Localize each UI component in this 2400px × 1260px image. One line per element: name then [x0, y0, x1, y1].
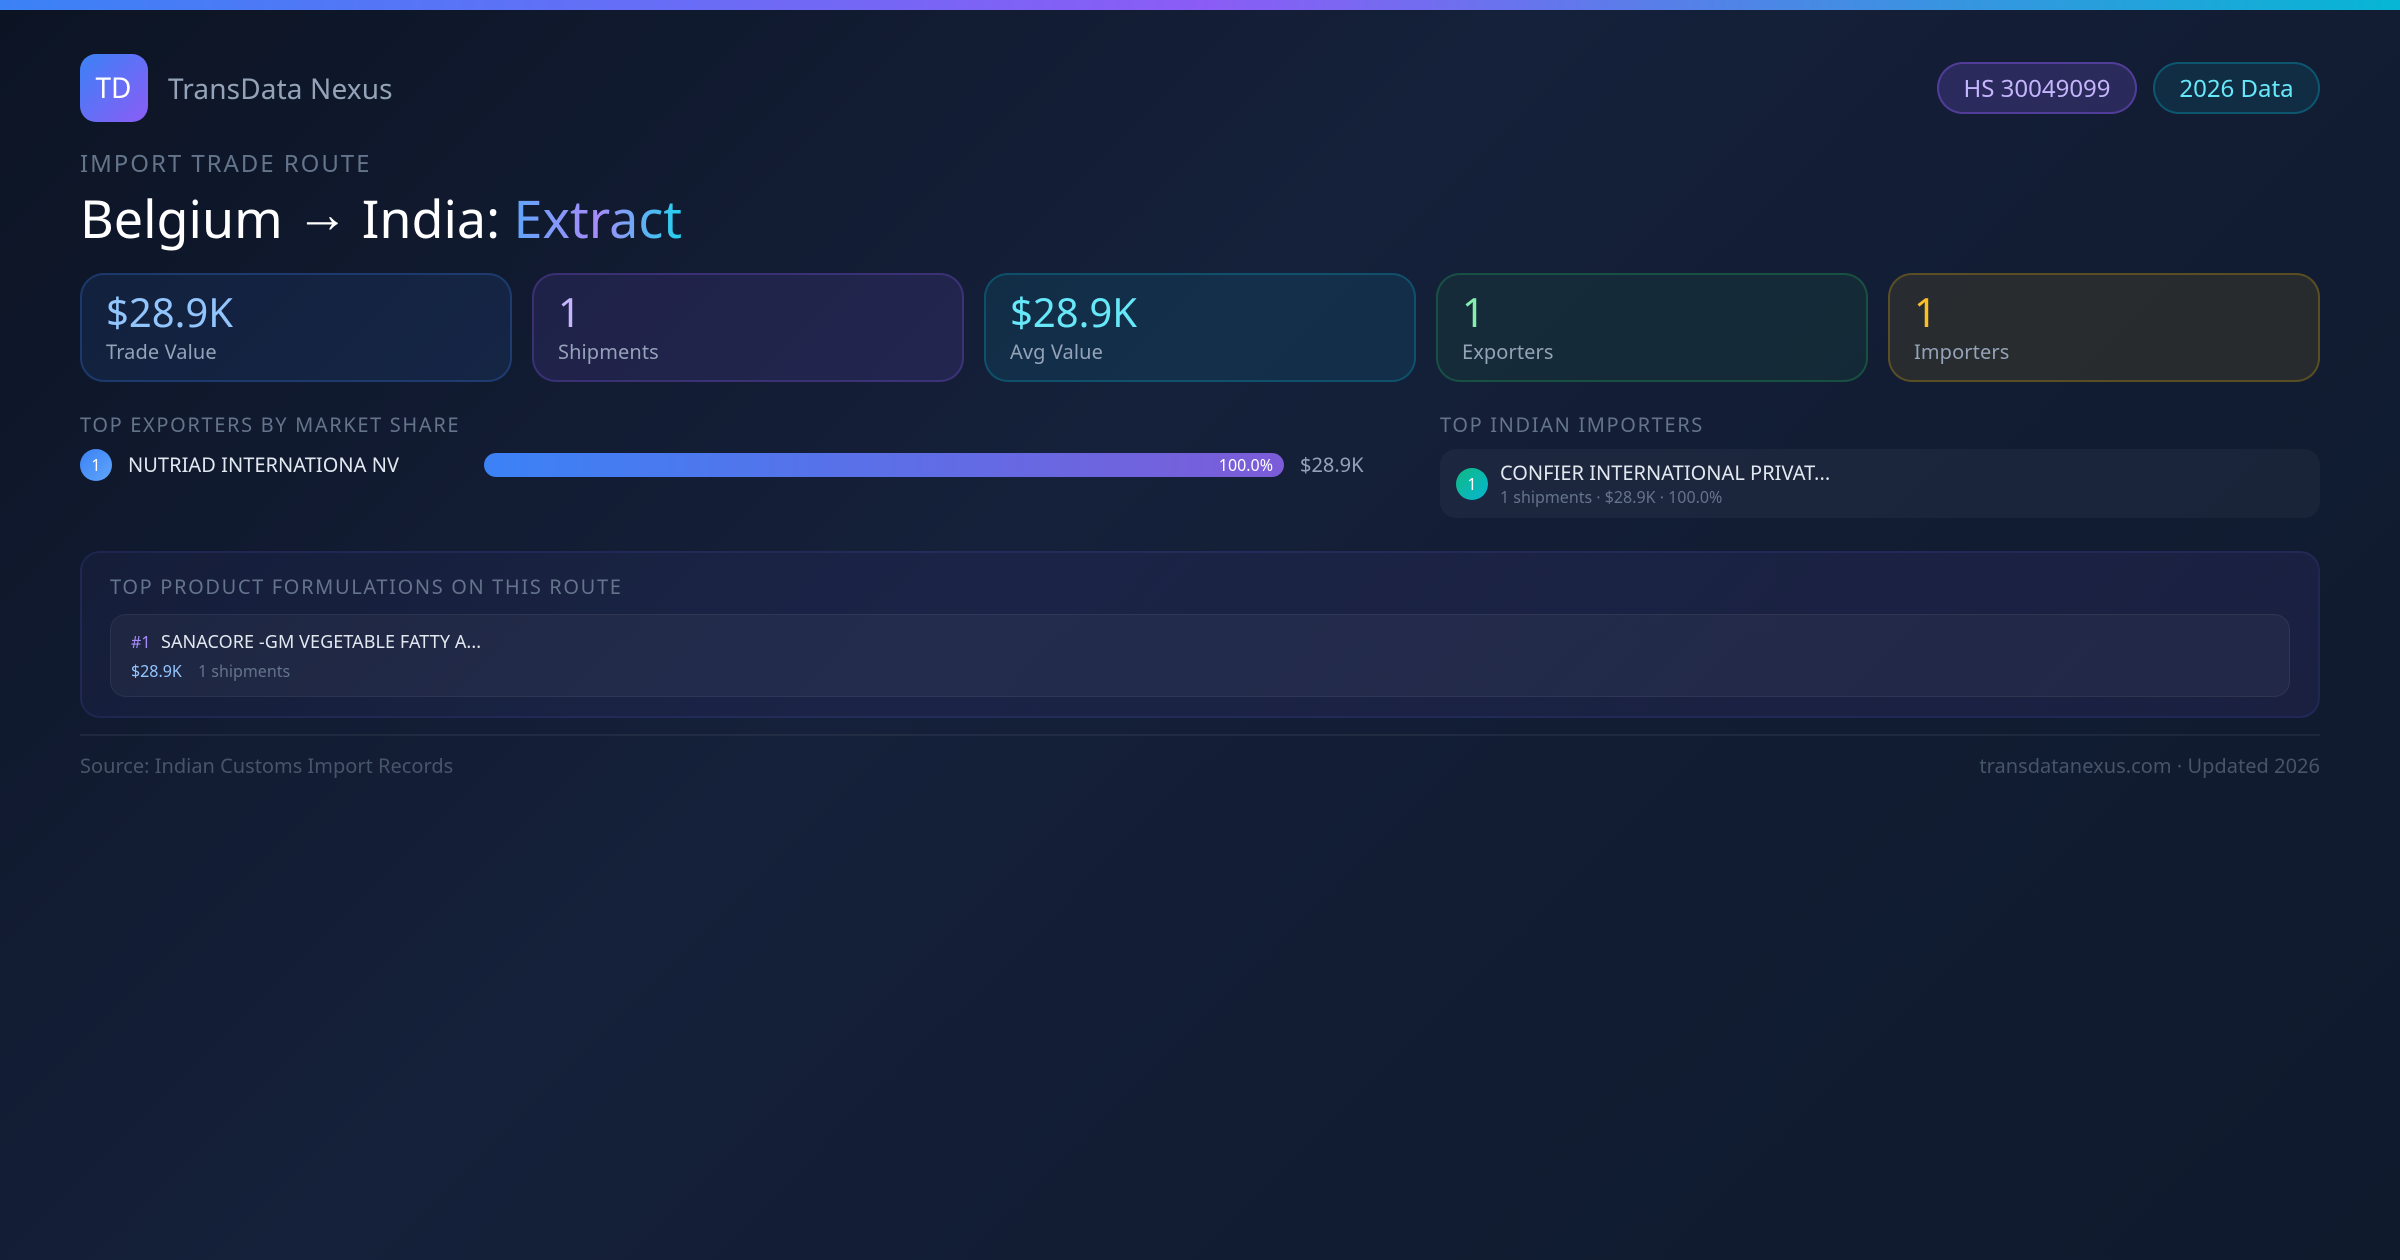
product name: SANACORE -GM VEGETABLE FATTY A...	[161, 630, 481, 654]
importer rank badge: 1	[1467, 473, 1477, 495]
product item 1	[110, 614, 2290, 697]
exporter share bar: 100.0%	[1219, 454, 1273, 476]
footer divider	[80, 734, 2320, 736]
stat card: trade value: $28.9K	[106, 284, 233, 339]
panel: top product formulations	[80, 551, 2320, 718]
stat card: shipments	[532, 273, 964, 382]
stat card: exporters	[1436, 273, 1868, 382]
exporter share bar	[484, 453, 1284, 477]
stat card: importers: 1	[1914, 284, 1937, 339]
stat card: avg value: Avg Value	[1010, 338, 1103, 365]
stat card: exporters: Exporters	[1462, 338, 1554, 365]
stat card: avg value	[984, 273, 1416, 382]
top gradient bar	[0, 0, 2400, 10]
footer: source: Source: Indian Customs Import Records	[80, 752, 453, 779]
pill: HS code	[1937, 62, 2137, 114]
panel heading: TOP PRODUCT FORMULATIONS ON THIS ROUTE	[110, 573, 622, 600]
stat card: exporters: 1	[1462, 284, 1485, 339]
stat card: importers	[1888, 273, 2320, 382]
brand name: TransData Nexus	[168, 70, 393, 108]
heading: top importers: TOP INDIAN IMPORTERS	[1440, 411, 1704, 438]
pill: data year	[2153, 62, 2320, 114]
stat card: shipments: 1	[558, 284, 581, 339]
pill: data year: 2026 Data	[2179, 72, 2294, 105]
importer details: 1 shipments · $28.9K · 100.0%	[1500, 486, 1722, 508]
stat card: importers: Importers	[1914, 338, 2009, 365]
product rank: #1	[131, 631, 150, 653]
exporter row 1	[80, 449, 1364, 481]
exporter rank badge: 1	[91, 454, 101, 476]
logo: TD	[80, 54, 148, 122]
title: Belgium → India: Extract	[80, 183, 682, 254]
importer name: CONFIER INTERNATIONAL PRIVAT...	[1500, 459, 1830, 486]
importer row 1	[1440, 449, 2320, 518]
product shipments: 1 shipments	[198, 660, 290, 682]
exporter value: $28.9K	[1300, 451, 1364, 478]
eyebrow label: IMPORT TRADE ROUTE	[80, 147, 371, 180]
stat card: avg value: $28.9K	[1010, 284, 1137, 339]
exporter name: NUTRIAD INTERNATIONA NV	[128, 451, 399, 478]
pill: HS code: HS 30049099	[1963, 72, 2111, 105]
importer rank badge	[1456, 468, 1488, 500]
footer: site: transdatanexus.com · Updated 2026	[1979, 752, 2320, 779]
heading: top exporters: TOP EXPORTERS BY MARKET SHARE	[80, 411, 460, 438]
stat card: shipments: Shipments	[558, 338, 659, 365]
logo: TD: TD	[95, 69, 132, 107]
product value: $28.9K	[131, 660, 182, 682]
stat card: trade value: Trade Value	[106, 338, 217, 365]
exporter rank badge	[80, 449, 112, 481]
stat card: trade value	[80, 273, 512, 382]
